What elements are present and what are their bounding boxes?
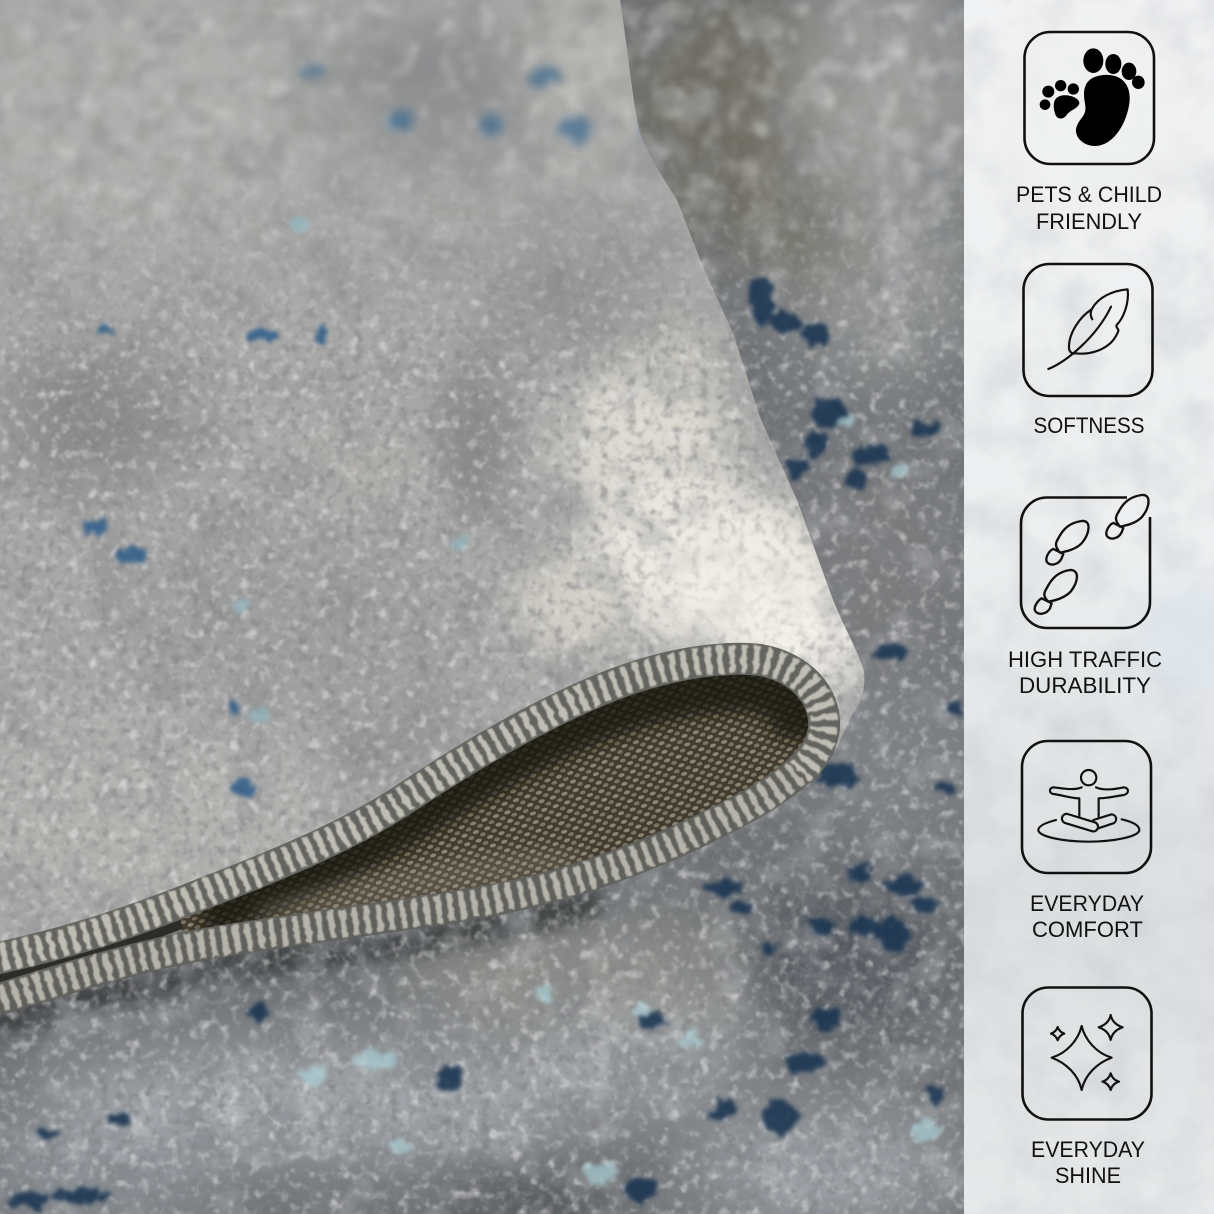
- label line 2: COMFORT: [1032, 917, 1143, 942]
- label: EVERYDAY: [1030, 891, 1144, 916]
- feature: everyday comfort: [1022, 741, 1151, 942]
- rug upper bound edge: [0, 659, 824, 960]
- rug underside backing: [180, 674, 808, 932]
- feature: everyday shine: [1022, 988, 1152, 1188]
- fold crease between the two bound edges: [0, 920, 180, 982]
- icon: baby foot and paw prints: [1040, 48, 1145, 146]
- feature: high traffic durability: [1008, 495, 1162, 698]
- icon box: [1024, 32, 1154, 164]
- icon: meditating person: [1038, 770, 1139, 842]
- rug blurred blue flecks: [296, 64, 659, 144]
- cream highlight over pile: [655, 525, 835, 655]
- feature: softness: [1024, 264, 1152, 438]
- icon: feather: [1048, 289, 1128, 369]
- icon box with gap: [1021, 498, 1150, 628]
- icon: sparkles: [1051, 1015, 1123, 1090]
- floor rug teal flecks: [300, 414, 940, 1182]
- side panel background: [964, 0, 1214, 1214]
- label line 2: DURABILITY: [1019, 673, 1151, 698]
- shadow under folded rug: [0, 900, 600, 1028]
- rug teal flecks: [228, 218, 468, 723]
- rug lower bound edge: [0, 745, 820, 1002]
- icon: footprints: [1035, 495, 1149, 614]
- label line 2: FRIENDLY: [1036, 209, 1142, 234]
- photo: folded rug top surface: [0, 0, 900, 1000]
- label: EVERYDAY: [1031, 1137, 1145, 1162]
- label line 2: SHINE: [1055, 1163, 1121, 1188]
- floor rug blue flecks: [10, 276, 964, 1209]
- rug pile texture: [0, 0, 861, 936]
- icon box: [1022, 988, 1152, 1120]
- floor rug pile texture: [0, 0, 964, 1214]
- label: HIGH TRAFFIC: [1008, 647, 1162, 672]
- label: PETS & CHILD: [1016, 182, 1162, 207]
- feature: pets and child friendly: [1016, 32, 1162, 234]
- underside shading: [200, 684, 801, 912]
- icon box: [1024, 264, 1152, 396]
- rug blue flecks: [84, 323, 328, 796]
- icon box: [1022, 741, 1151, 873]
- label: SOFTNESS: [1034, 413, 1144, 438]
